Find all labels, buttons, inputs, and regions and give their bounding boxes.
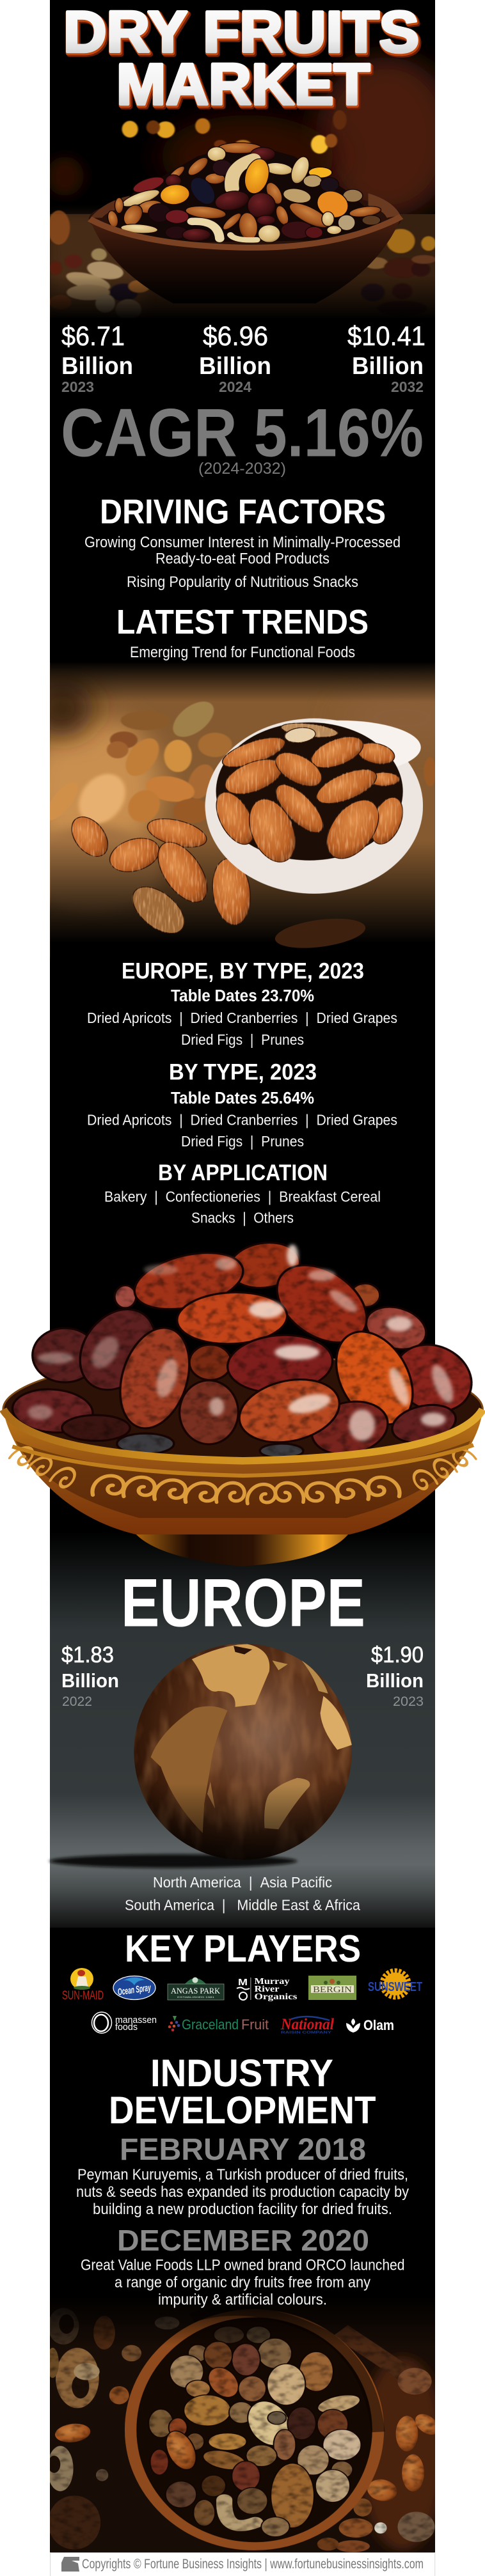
foreground almonds xyxy=(71,816,251,933)
February 2018 development xyxy=(76,2133,409,2218)
CAGR: (2024-2032) xyxy=(198,460,286,478)
date highlights xyxy=(28,1244,457,1441)
logo: Graceland Fruit: Fruit xyxy=(241,2017,269,2033)
logo: Angas Park xyxy=(168,1977,224,2000)
scattered nuts around bowl xyxy=(47,2308,443,2552)
industry development heading xyxy=(109,2052,376,2132)
logo: Murray River Organics: Organics xyxy=(255,1992,298,2002)
Europe by type: Dried Figs | Prunes xyxy=(181,1031,304,1048)
bowl ornament xyxy=(10,1443,476,1504)
blurred background almonds xyxy=(40,696,436,829)
by type: BY TYPE, 2023 xyxy=(169,1060,317,1084)
February 2018 development: building a new production facility for dried fruits. xyxy=(93,2201,392,2218)
wooden bowl back xyxy=(88,199,401,244)
December 2020 development: a range of organic dry fruits free from any xyxy=(115,2274,370,2291)
market size 2023: $6.71 xyxy=(61,321,125,352)
wooden bowl xyxy=(131,2313,378,2546)
driving factors list: Rising Popularity of Nutritious Snacks xyxy=(127,574,358,591)
almonds in bowl xyxy=(209,721,408,866)
February 2018 development: nuts & seeds has expanded its production capacity by xyxy=(76,2183,409,2201)
title xyxy=(63,0,421,120)
Europe by type: Dried Apricots | Dried Cranberries | Dried Grapes xyxy=(87,1010,397,1026)
logo: Graceland Fruit: Graceland xyxy=(182,2017,239,2033)
market size 2024: $6.96 xyxy=(203,321,268,352)
other regions xyxy=(125,1874,360,1913)
market size 2032 xyxy=(347,321,425,395)
title: MARKET xyxy=(117,54,370,118)
gold rim xyxy=(3,1409,482,1461)
logo: Sun-Maid xyxy=(62,1968,104,2002)
logo: Angas Park: ESTABLISHED 1981 xyxy=(177,1996,214,1999)
market size 2032: $10.41 xyxy=(347,321,425,352)
by application: Bakery | Confectioneries | Breakfast Cereal xyxy=(104,1188,381,1205)
Europe 2022 value: 2022 xyxy=(62,1694,92,1709)
logo: National Raisin Company: RAISIN COMPANY xyxy=(281,2031,332,2034)
by type: Dried Apricots | Dried Cranberries | Dried Grapes xyxy=(87,1111,397,1128)
December 2020 development: impurity & artificial colours. xyxy=(158,2291,327,2308)
driving factors heading: DRIVING FACTORS xyxy=(100,492,386,531)
Europe section background xyxy=(50,1531,435,1928)
December 2020 development: Great Value Foods LLP owned brand ORCO launched xyxy=(81,2257,404,2274)
hero image: bowl of mixed dry fruits xyxy=(47,56,458,328)
other regions: South America | Middle East & Africa xyxy=(125,1896,360,1913)
Europe 2023 value: Billion xyxy=(366,1669,424,1692)
logo: Bergin: BERGIN xyxy=(313,1985,352,1994)
market size 2024: 2024 xyxy=(219,379,251,395)
industry development heading: INDUSTRY xyxy=(150,2052,333,2095)
market size 2032: Billion xyxy=(352,353,424,380)
bowl front xyxy=(3,1409,482,1534)
logo: Murray River Organics: Murray xyxy=(255,1977,289,1987)
logo: Ocean Spray: Ocean Spray xyxy=(117,1982,152,1998)
latest trends text: Emerging Trend for Functional Foods xyxy=(130,644,355,661)
logo: Manassen Foods: manassen xyxy=(115,2015,157,2026)
by application: BY APPLICATION xyxy=(158,1160,328,1185)
continents xyxy=(151,1644,352,1833)
title: DRY FRUITS xyxy=(64,1,420,66)
dates in golden bowl xyxy=(3,1238,485,1534)
latest trends heading: LATEST TRENDS xyxy=(116,603,369,641)
driving factors list xyxy=(84,534,401,591)
logo: Murray River Organics xyxy=(237,1977,298,2002)
by application: Snacks | Others xyxy=(191,1210,294,1226)
logo: Angas Park: ANGAS PARK xyxy=(171,1986,221,1995)
footer xyxy=(50,2552,435,2576)
market size 2024: Billion xyxy=(199,353,271,380)
Europe 2022 value: $1.83 xyxy=(61,1643,114,1667)
mixed nuts image xyxy=(47,2294,445,2552)
logo: Sunsweet: SUNSWEET xyxy=(368,1980,422,1994)
Europe by type xyxy=(87,959,397,1048)
logo: Graceland Fruit xyxy=(168,2016,269,2033)
scattered nuts on table xyxy=(47,210,436,320)
by type xyxy=(87,1060,397,1150)
title: DRY FRUITS xyxy=(63,0,419,65)
Europe by type: Table Dates 23.70% xyxy=(171,987,314,1005)
title: DRY FRUITS xyxy=(65,3,421,67)
dates xyxy=(10,1238,485,1462)
logo: Olam: Olam xyxy=(363,2017,394,2033)
February 2018 development: FEBRUARY 2018 xyxy=(120,2133,366,2167)
by type: Dried Figs | Prunes xyxy=(181,1133,304,1150)
bowl back xyxy=(3,1355,482,1464)
February 2018 development: Peyman Kuruyemis, a Turkish producer of dried fruits, xyxy=(77,2166,408,2183)
Europe 2022 value xyxy=(61,1643,119,1709)
pile of nuts and raisins xyxy=(106,143,384,242)
Europe 2023 value xyxy=(366,1643,424,1709)
driving factors list: Growing Consumer Interest in Minimally-Processed xyxy=(84,534,401,551)
by type: Table Dates 25.64% xyxy=(171,1089,314,1107)
December 2020 development xyxy=(81,2224,404,2308)
other regions: North America | Asia Pacific xyxy=(153,1874,332,1891)
logo: Manassen Foods xyxy=(92,2012,157,2033)
bokeh lights xyxy=(122,110,347,153)
driving factors list: Ready-to-eat Food Products xyxy=(155,550,330,568)
black panel xyxy=(50,0,435,2552)
market size 2024 xyxy=(199,321,271,395)
logo: Bergin xyxy=(308,1976,356,2000)
logo: Sun-Maid: SUN-MAID xyxy=(62,1989,104,2002)
logo: Manassen Foods: foods xyxy=(115,2022,138,2033)
logo: National Raisin Company: National xyxy=(280,2016,334,2033)
market size 2032: 2032 xyxy=(391,379,424,395)
white bowl xyxy=(205,719,423,894)
logo: Sunsweet xyxy=(368,1971,422,1997)
nuts in bowl xyxy=(148,2326,363,2537)
market size 2023: Billion xyxy=(61,353,133,380)
market size 2023: 2023 xyxy=(61,379,94,395)
Europe 2023 value: 2023 xyxy=(393,1694,424,1709)
logo: Murray River Organics: River xyxy=(255,1985,279,1994)
by application xyxy=(104,1160,381,1226)
CAGR: CAGR 5.16% xyxy=(61,394,424,471)
almond image xyxy=(50,662,435,958)
logo: Olam xyxy=(346,2017,394,2033)
Europe heading: EUROPE xyxy=(121,1564,365,1641)
golden bowl foot xyxy=(136,1534,348,1566)
logo: Murray River Organics: M xyxy=(238,1977,248,1988)
wooden globe xyxy=(49,1644,352,1868)
industry development heading: DEVELOPMENT xyxy=(109,2089,376,2132)
footer logo icon xyxy=(61,2557,79,2572)
title: MARKET xyxy=(116,52,370,117)
title: MARKET xyxy=(118,55,372,120)
Europe 2022 value: Billion xyxy=(61,1669,119,1692)
December 2020 development: DECEMBER 2020 xyxy=(117,2224,369,2257)
logo: Ocean Spray xyxy=(113,1976,155,2000)
market size 2023 xyxy=(61,321,133,395)
key players heading: KEY PLAYERS xyxy=(125,1928,361,1970)
Europe 2023 value: $1.90 xyxy=(371,1643,424,1667)
wooden bowl front xyxy=(90,217,401,304)
Europe by type: EUROPE, BY TYPE, 2023 xyxy=(122,959,364,983)
